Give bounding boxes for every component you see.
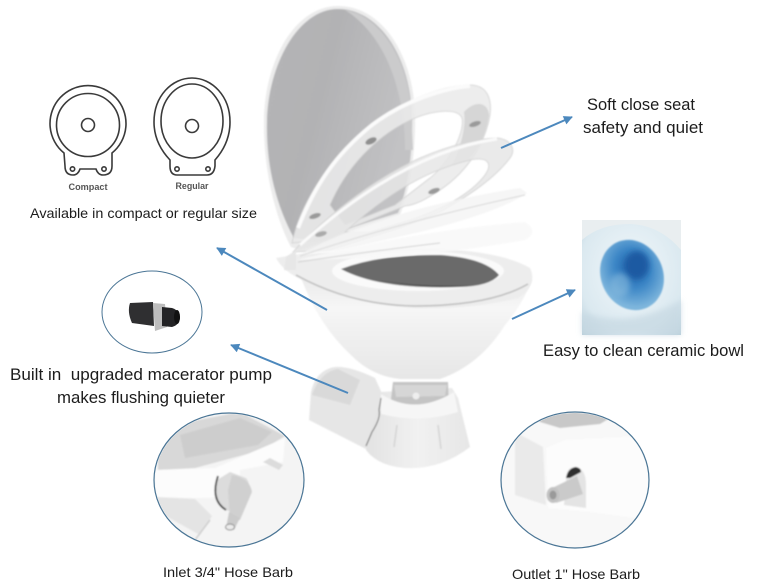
caption: ceramic bowl: Easy to clean ceramic bowl <box>543 341 744 360</box>
lid <box>264 6 415 250</box>
seat stage 4 <box>297 222 532 260</box>
seat stage 2 <box>293 138 513 252</box>
detail circle: macerator pump <box>102 271 202 353</box>
bowl <box>300 270 532 379</box>
caption: macerator pump: makes flushing quieter <box>57 388 225 407</box>
icon: regular size outline <box>154 78 230 175</box>
label: Regular: Regular <box>176 181 209 192</box>
caption: size availability: Available in compact or regular size <box>30 205 257 221</box>
pump housing <box>309 367 470 468</box>
photo: blue water in ceramic bowl <box>582 220 681 335</box>
seat rim <box>276 248 532 308</box>
callout: soft close seat <box>583 95 703 137</box>
caption: outlet hose barb: Outlet 1" Hose Barb <box>512 566 640 582</box>
seat stage 3 <box>297 188 527 256</box>
arrow: to size options <box>217 248 327 310</box>
caption: macerator pump: Built in upgraded macerator pump <box>10 365 272 384</box>
seat stage 1 <box>292 85 490 243</box>
toilet illustration <box>264 6 532 468</box>
caption: inlet hose barb: Inlet 3/4" Hose Barb <box>163 564 293 580</box>
detail circle: outlet hose barb <box>500 410 650 550</box>
detail circle: inlet hose barb <box>150 410 310 550</box>
callout: soft close seat: safety and quiet <box>583 118 703 137</box>
callout: soft close seat: Soft close seat <box>587 95 695 114</box>
opening seat stages <box>284 85 532 270</box>
label: Compact: Compact <box>68 182 108 193</box>
arrow: to soft close text <box>501 117 572 148</box>
arrow: to macerator pump <box>231 345 348 393</box>
icon: compact size outline <box>50 86 126 175</box>
arrow: to ceramic bowl photo <box>512 290 575 319</box>
caption: macerator pump <box>10 365 272 407</box>
